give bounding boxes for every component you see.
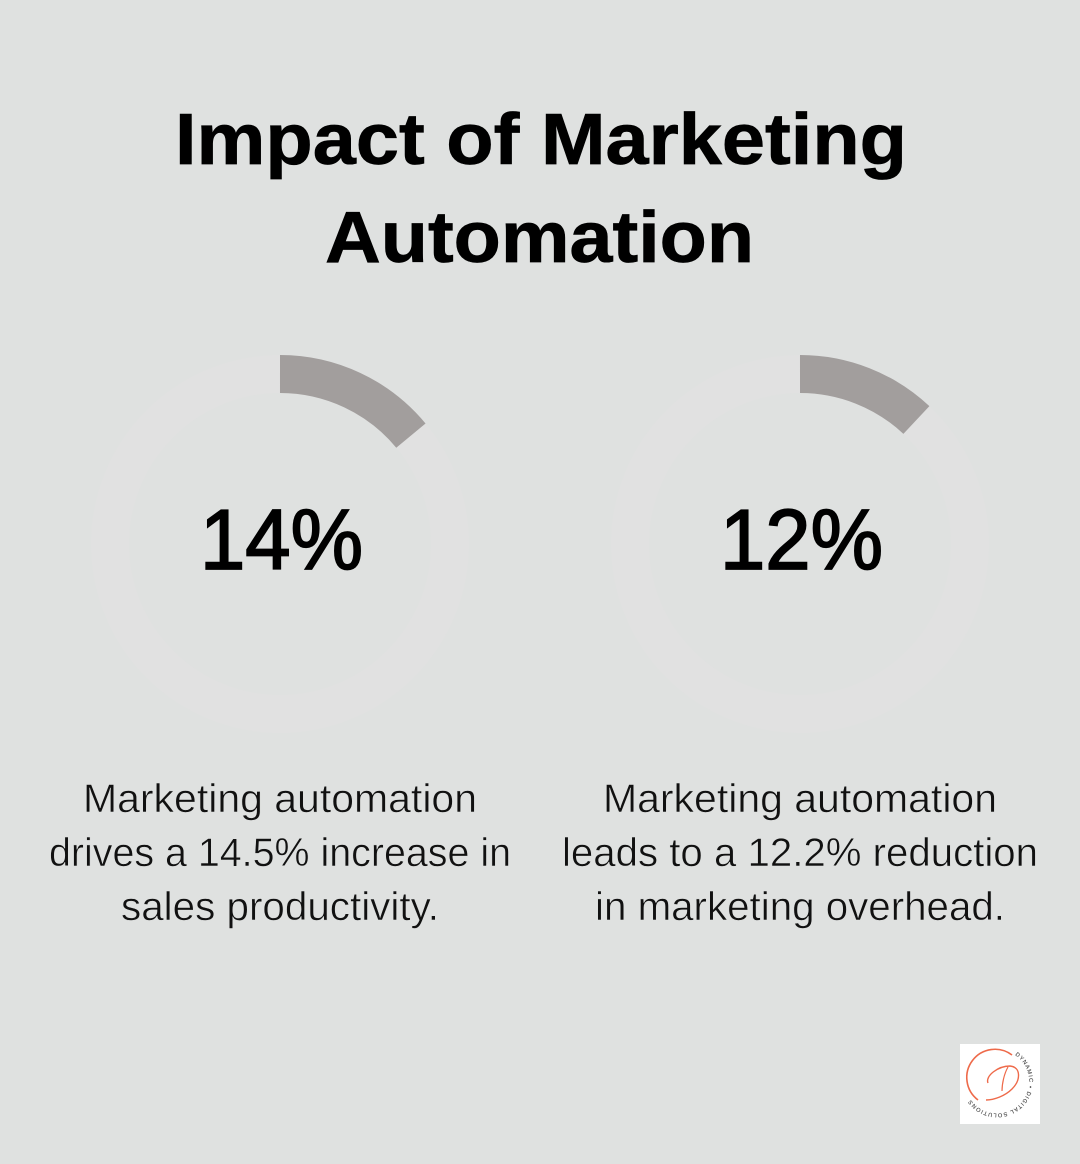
panel: 14% sales productivity xyxy=(49,374,511,929)
donut chart: 12% xyxy=(630,374,970,714)
description: sales productivity xyxy=(49,777,511,929)
title xyxy=(175,100,907,278)
panel: 12% marketing overhead xyxy=(562,374,1038,929)
title: Impact of Marketing xyxy=(175,100,907,180)
donut chart: 14%: 14% xyxy=(200,493,363,588)
logo: Dynamic Digital Solutions: DYNAMIC • DIGITAL SOLUTIONS xyxy=(968,1052,1034,1118)
description: marketing overhead: leads to a 12.2% reduction xyxy=(562,831,1038,875)
description: sales productivity: sales productivity. xyxy=(121,885,439,929)
description: marketing overhead: in marketing overhead. xyxy=(595,885,1005,929)
title: Automation xyxy=(325,198,754,278)
logo: Dynamic Digital Solutions xyxy=(960,1044,1040,1124)
donut chart: 12%: 12% xyxy=(720,493,883,588)
description: sales productivity: drives a 14.5% increase in xyxy=(49,831,511,875)
donut chart: 14% xyxy=(110,374,450,714)
description: marketing overhead: Marketing automation xyxy=(603,777,997,821)
description: marketing overhead xyxy=(562,777,1038,929)
description: sales productivity: Marketing automation xyxy=(83,777,477,821)
